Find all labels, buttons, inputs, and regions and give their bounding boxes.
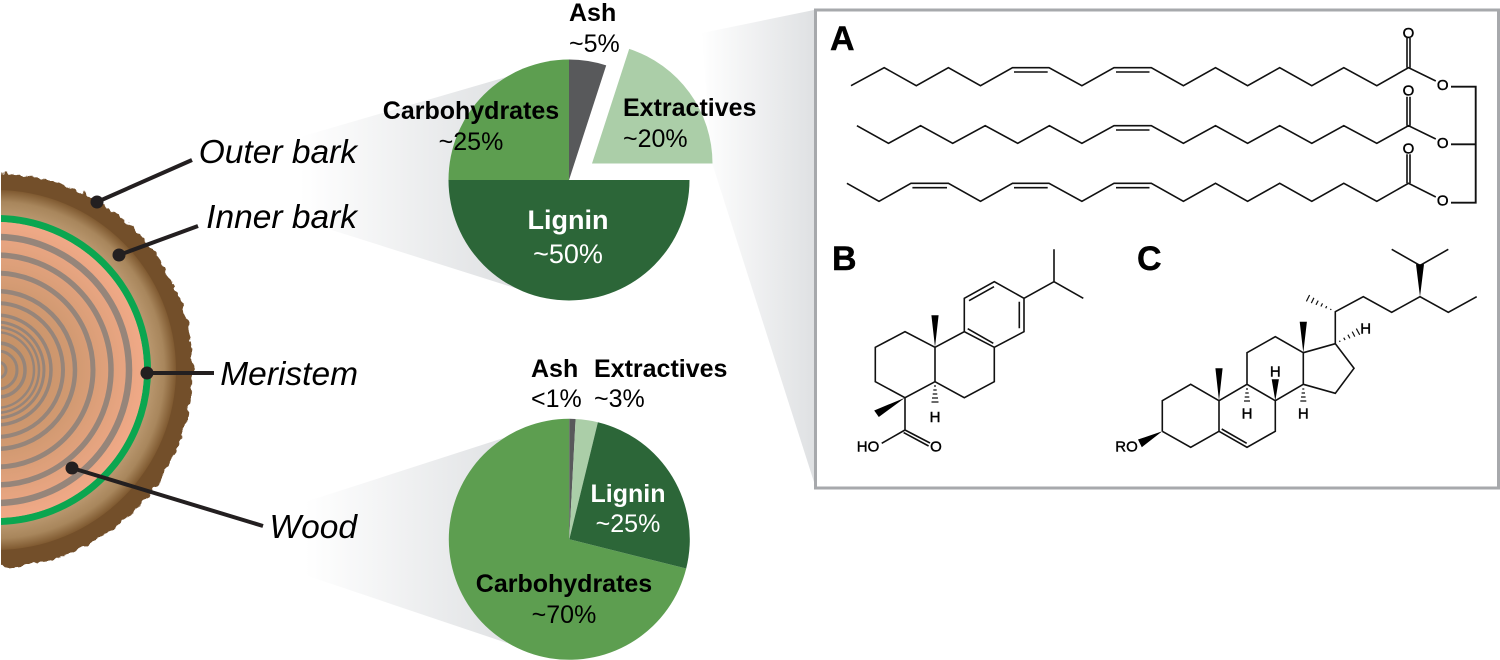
growth rings — [0, 237, 129, 503]
wedge bonds — [874, 315, 939, 417]
text: ash: Ash — [531, 355, 578, 383]
chain 1 — [851, 25, 1449, 94]
text: carbohydrates — [383, 97, 559, 156]
panel frame — [816, 10, 1498, 488]
chain 3: O — [1437, 192, 1449, 210]
text: lignin: ~50% — [533, 239, 603, 269]
leader: inner bark — [112, 226, 198, 262]
label: inner bark: Inner bark — [206, 199, 359, 236]
structure C: sterol — [1115, 240, 1477, 456]
structure B: abietic-type resin acid — [832, 240, 1083, 456]
label: outer bark: Outer bark — [199, 134, 359, 171]
text: lignin — [591, 480, 665, 538]
rings — [875, 249, 1083, 446]
chain 1: O — [1437, 77, 1449, 94]
slice: ash — [569, 60, 606, 180]
structure B: abietic-type resin acid: HO — [857, 438, 879, 456]
slice: ash — [569, 419, 576, 539]
hashed bond — [932, 386, 938, 402]
slice: lignin — [448, 180, 690, 300]
pie chart: bark composition — [383, 0, 756, 300]
letter C: C — [1137, 240, 1162, 278]
meristem ring — [0, 218, 148, 522]
text: ash: <1% — [531, 385, 582, 413]
atom labels: H — [930, 409, 940, 426]
text: ash: ~5% — [569, 30, 620, 58]
gradient fan: wood to bottom pie — [305, 435, 513, 643]
hashed bonds — [1244, 295, 1360, 401]
text: carbohydrates: ~70% — [532, 601, 596, 629]
leader: outer bark — [90, 160, 192, 208]
structure C: sterol: H — [1298, 406, 1309, 422]
text: extractives: Extractives — [594, 355, 727, 383]
pie chart: wood composition — [449, 355, 727, 660]
structure B: abietic-type resin acid: O — [930, 438, 942, 456]
inner bark — [0, 190, 176, 550]
text: ash — [531, 355, 582, 413]
structure C: sterol: H — [1242, 406, 1252, 422]
structure C: sterol: RO — [1115, 438, 1138, 456]
text: extractives — [594, 355, 727, 413]
slice: extractives — [592, 49, 712, 164]
chain 3 — [847, 140, 1449, 210]
text: lignin: ~25% — [596, 510, 660, 538]
text: lignin: Lignin — [528, 205, 608, 235]
text: extractives: ~3% — [594, 385, 645, 413]
leader: meristem — [140, 366, 214, 380]
outer bark — [0, 173, 193, 567]
slice: carbohydrates — [449, 419, 686, 660]
text: carbohydrates: ~25% — [439, 128, 503, 156]
chain 2 — [857, 82, 1449, 152]
label: meristem: Meristem — [220, 356, 358, 393]
chain 2: O — [1437, 135, 1449, 152]
panel: extractive structures — [816, 10, 1498, 488]
wood — [0, 222, 144, 518]
text: ash — [569, 0, 620, 58]
text: lignin — [528, 205, 608, 269]
text: extractives: Extractives — [623, 94, 756, 122]
gradient fan: extractives to structures panel — [702, 10, 814, 482]
slice: carbohydrates — [448, 60, 569, 180]
chain 1: O — [1403, 25, 1414, 42]
structure C: sterol: H — [1360, 320, 1371, 338]
glycerol backbone — [1451, 87, 1476, 203]
text: carbohydrates: Carbohydrates — [476, 570, 652, 598]
text: extractives — [623, 94, 756, 153]
text: lignin: Lignin — [591, 480, 665, 508]
slice: lignin — [569, 422, 690, 568]
chain 2: O — [1403, 82, 1414, 100]
chain 3: O — [1403, 140, 1414, 158]
letter B: B — [832, 240, 857, 278]
wedge bonds — [1138, 264, 1424, 447]
rings and side chain — [1162, 249, 1477, 447]
text: carbohydrates: Carbohydrates — [383, 97, 559, 125]
text: extractives: ~20% — [623, 125, 688, 153]
label: wood: Wood — [269, 509, 358, 546]
leader: wood — [66, 462, 263, 526]
tree cross-section — [0, 160, 193, 580]
gradient fan: bark to top pie — [300, 76, 515, 288]
structure A: triglyceride — [830, 20, 1476, 210]
slice: extractives — [569, 419, 598, 539]
text: carbohydrates — [476, 570, 652, 629]
atom labels: H — [1270, 364, 1281, 380]
letter A: A — [830, 20, 855, 58]
